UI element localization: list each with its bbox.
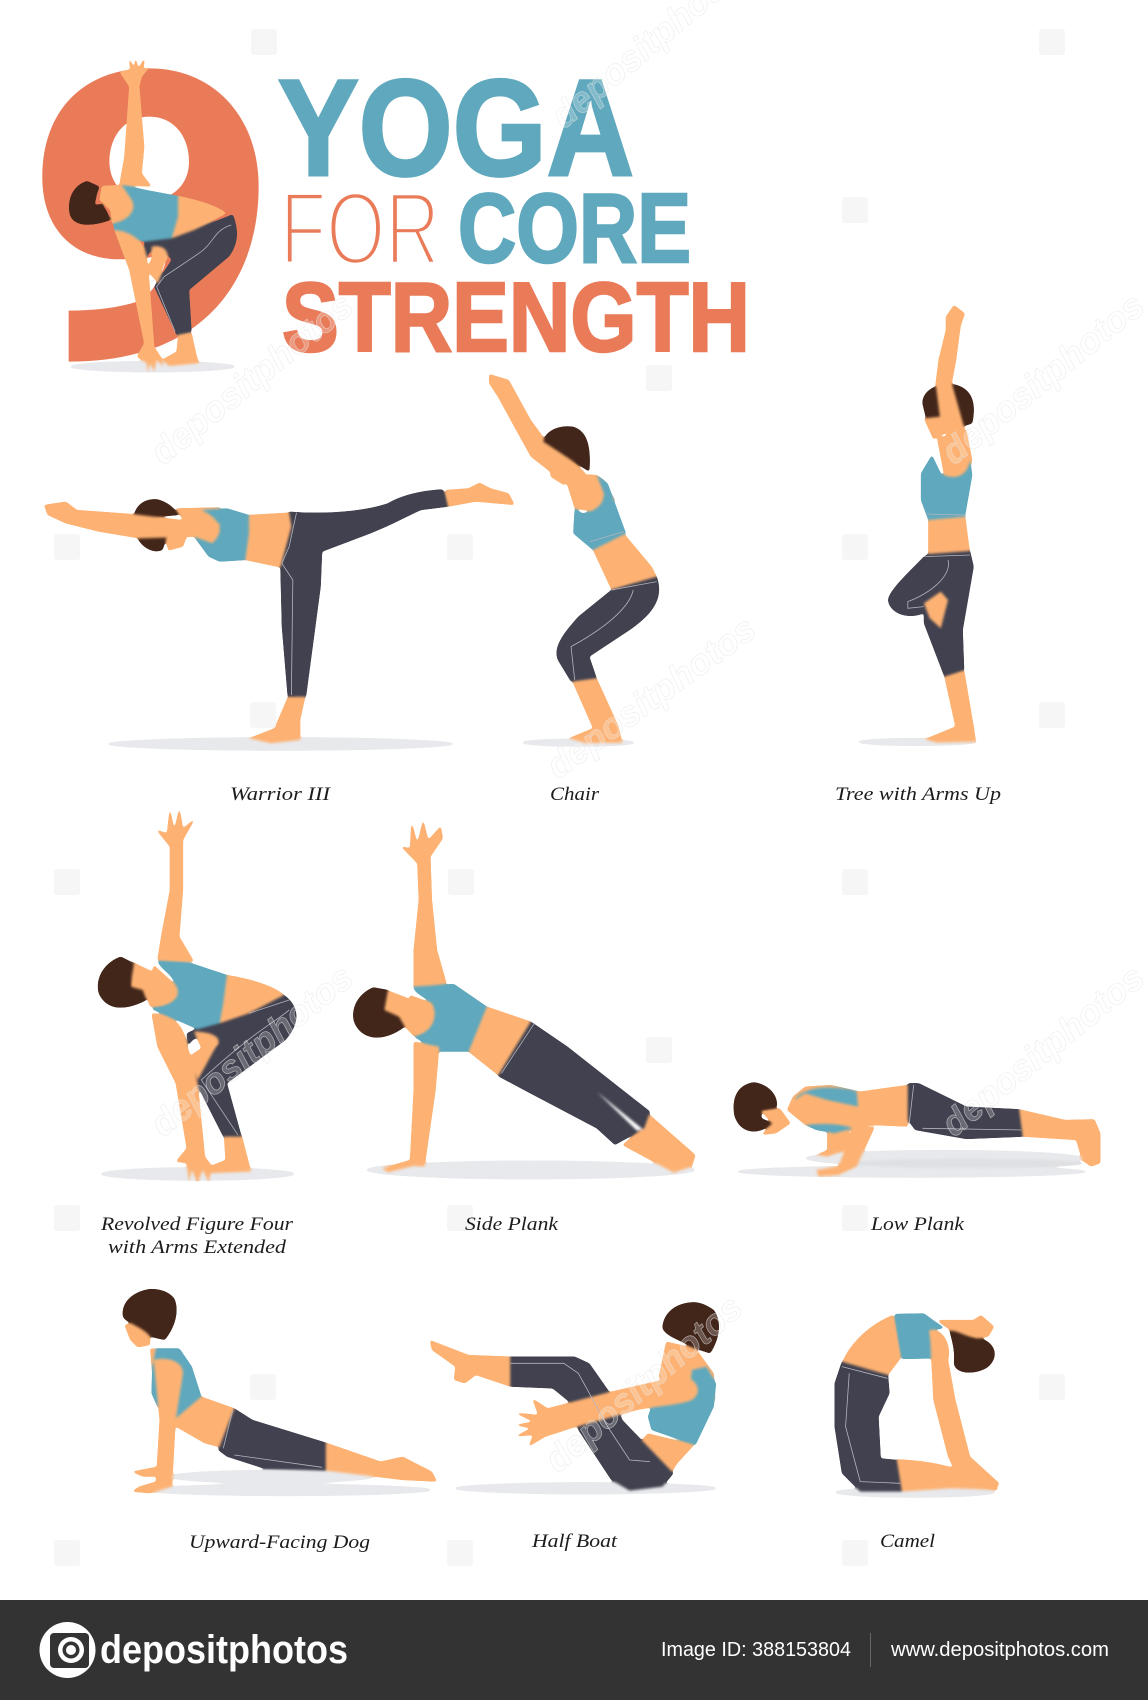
figure: Tree with Arms Up: [857, 305, 977, 746]
label: Side Plank: Side Plank: [465, 1214, 559, 1235]
logo wordmark: depositphotos: [100, 1628, 348, 1672]
label: Low Plank: Low Plank: [870, 1214, 965, 1235]
big number 9: [42, 68, 259, 362]
watermarks: depositphotos: [933, 284, 1148, 472]
watermarks: depositphotos: [142, 956, 361, 1144]
label: Half Boat: Half Boat: [531, 1531, 618, 1552]
label: Chair: Chair: [550, 784, 600, 805]
figure: Upward-Facing Dog: [123, 1289, 437, 1496]
figure: header revolved pose: [69, 55, 237, 373]
website url: www.depositphotos.com: [890, 1639, 1109, 1661]
figure: Revolved Figure Four: [98, 807, 296, 1183]
watermarks: depositphotos: [142, 284, 361, 472]
pose labels: [100, 784, 1001, 1553]
figure: Camel: [835, 1313, 999, 1498]
figure: Chair: [489, 374, 659, 747]
label: Tree with Arms Up: Tree with Arms Up: [835, 784, 1001, 805]
image id: Image ID: 388153804: [661, 1639, 851, 1661]
watermarks: depositphotos: [539, 608, 763, 786]
title word: FOR: FOR: [280, 171, 440, 286]
figure: Warrior III: [44, 483, 515, 751]
icon: camera logo: [40, 1622, 96, 1678]
watermarks: depositphotos: [933, 956, 1148, 1144]
footer bar: [0, 1600, 1148, 1700]
figure: Side Plank: [353, 819, 695, 1179]
label: Camel: Camel: [880, 1531, 935, 1552]
title word: YOGA: YOGA: [278, 52, 634, 205]
title word: CORE: CORE: [458, 173, 691, 283]
label: with Arms Extended: with Arms Extended: [108, 1237, 287, 1258]
label: Upward-Facing Dog: Upward-Facing Dog: [189, 1532, 370, 1553]
watermarks: depositphotos: [536, 1286, 750, 1480]
title word: STRENGTH: STRENGTH: [282, 262, 750, 372]
figure: Half Boat: [430, 1302, 719, 1494]
label: Warrior III: Warrior III: [230, 784, 332, 805]
label: Revolved Figure Four: Revolved Figure Four: [100, 1214, 294, 1235]
figure: Low Plank: [734, 1082, 1100, 1178]
title: [278, 52, 750, 372]
